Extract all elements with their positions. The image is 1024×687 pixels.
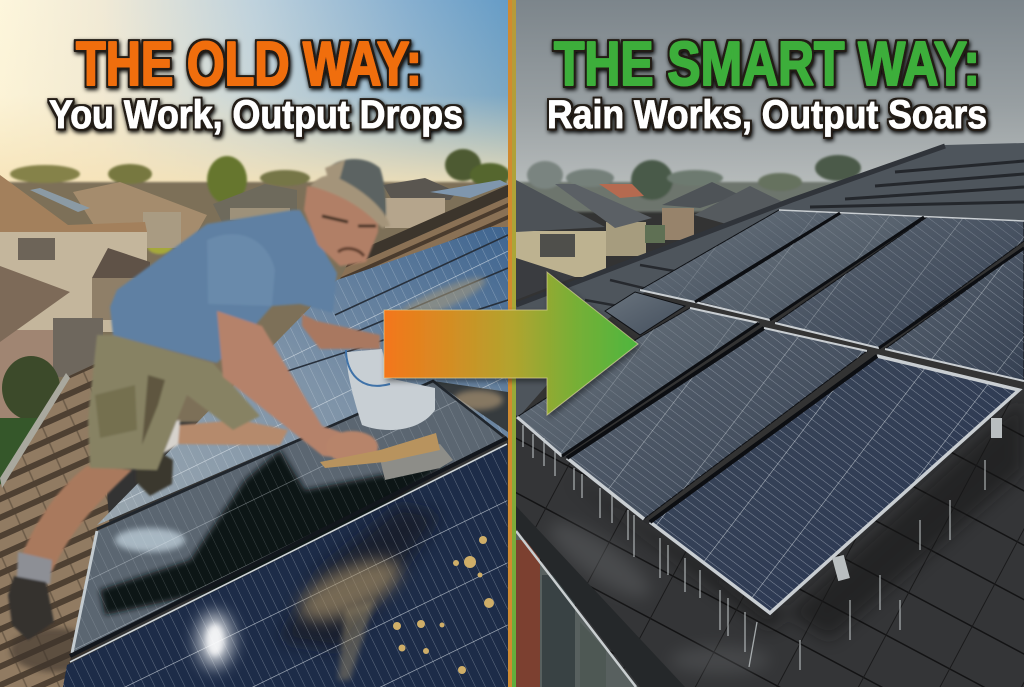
neighbouring houses right (516, 180, 789, 300)
tile roof left (0, 363, 110, 687)
arrow: old way to smart way (384, 272, 638, 415)
arms (216, 310, 342, 458)
panel: smart way scene (516, 0, 1024, 687)
panel: old way scene (0, 0, 510, 687)
bottom solar panel left (63, 438, 508, 687)
divider (508, 0, 516, 687)
shorts (88, 335, 260, 470)
head and cap (304, 186, 378, 266)
upper tile roof left (337, 184, 510, 285)
neighbouring houses left (0, 175, 508, 490)
tree line left (0, 149, 510, 422)
panel mounting clips (832, 418, 1002, 581)
heading: the smart way (547, 30, 987, 137)
rain drips (523, 425, 985, 670)
scrub brush (320, 433, 453, 480)
solar panels right (517, 210, 1024, 613)
front leg and boot (178, 420, 288, 445)
panel cell grid right (517, 210, 1024, 613)
upper solar panels left (97, 227, 508, 525)
heading: the old way: THE OLD WAY: (76, 30, 422, 99)
panel frames right (517, 210, 1024, 613)
shirt (110, 210, 337, 363)
heading: the old way: You Work, Output Drops (49, 93, 463, 137)
sky left (0, 0, 508, 200)
main slate roof right (516, 385, 1024, 687)
dirt and glare on panels (197, 536, 494, 680)
person scrubbing panels (8, 159, 390, 640)
gutter and wall (516, 506, 685, 687)
tree line right (516, 155, 861, 212)
heading: the old way (49, 30, 463, 137)
upper dark roof right (516, 143, 1024, 420)
sky right (516, 0, 1024, 184)
back leg and boot (18, 466, 132, 572)
middle solar panel left (72, 381, 503, 653)
bucket (346, 349, 435, 430)
